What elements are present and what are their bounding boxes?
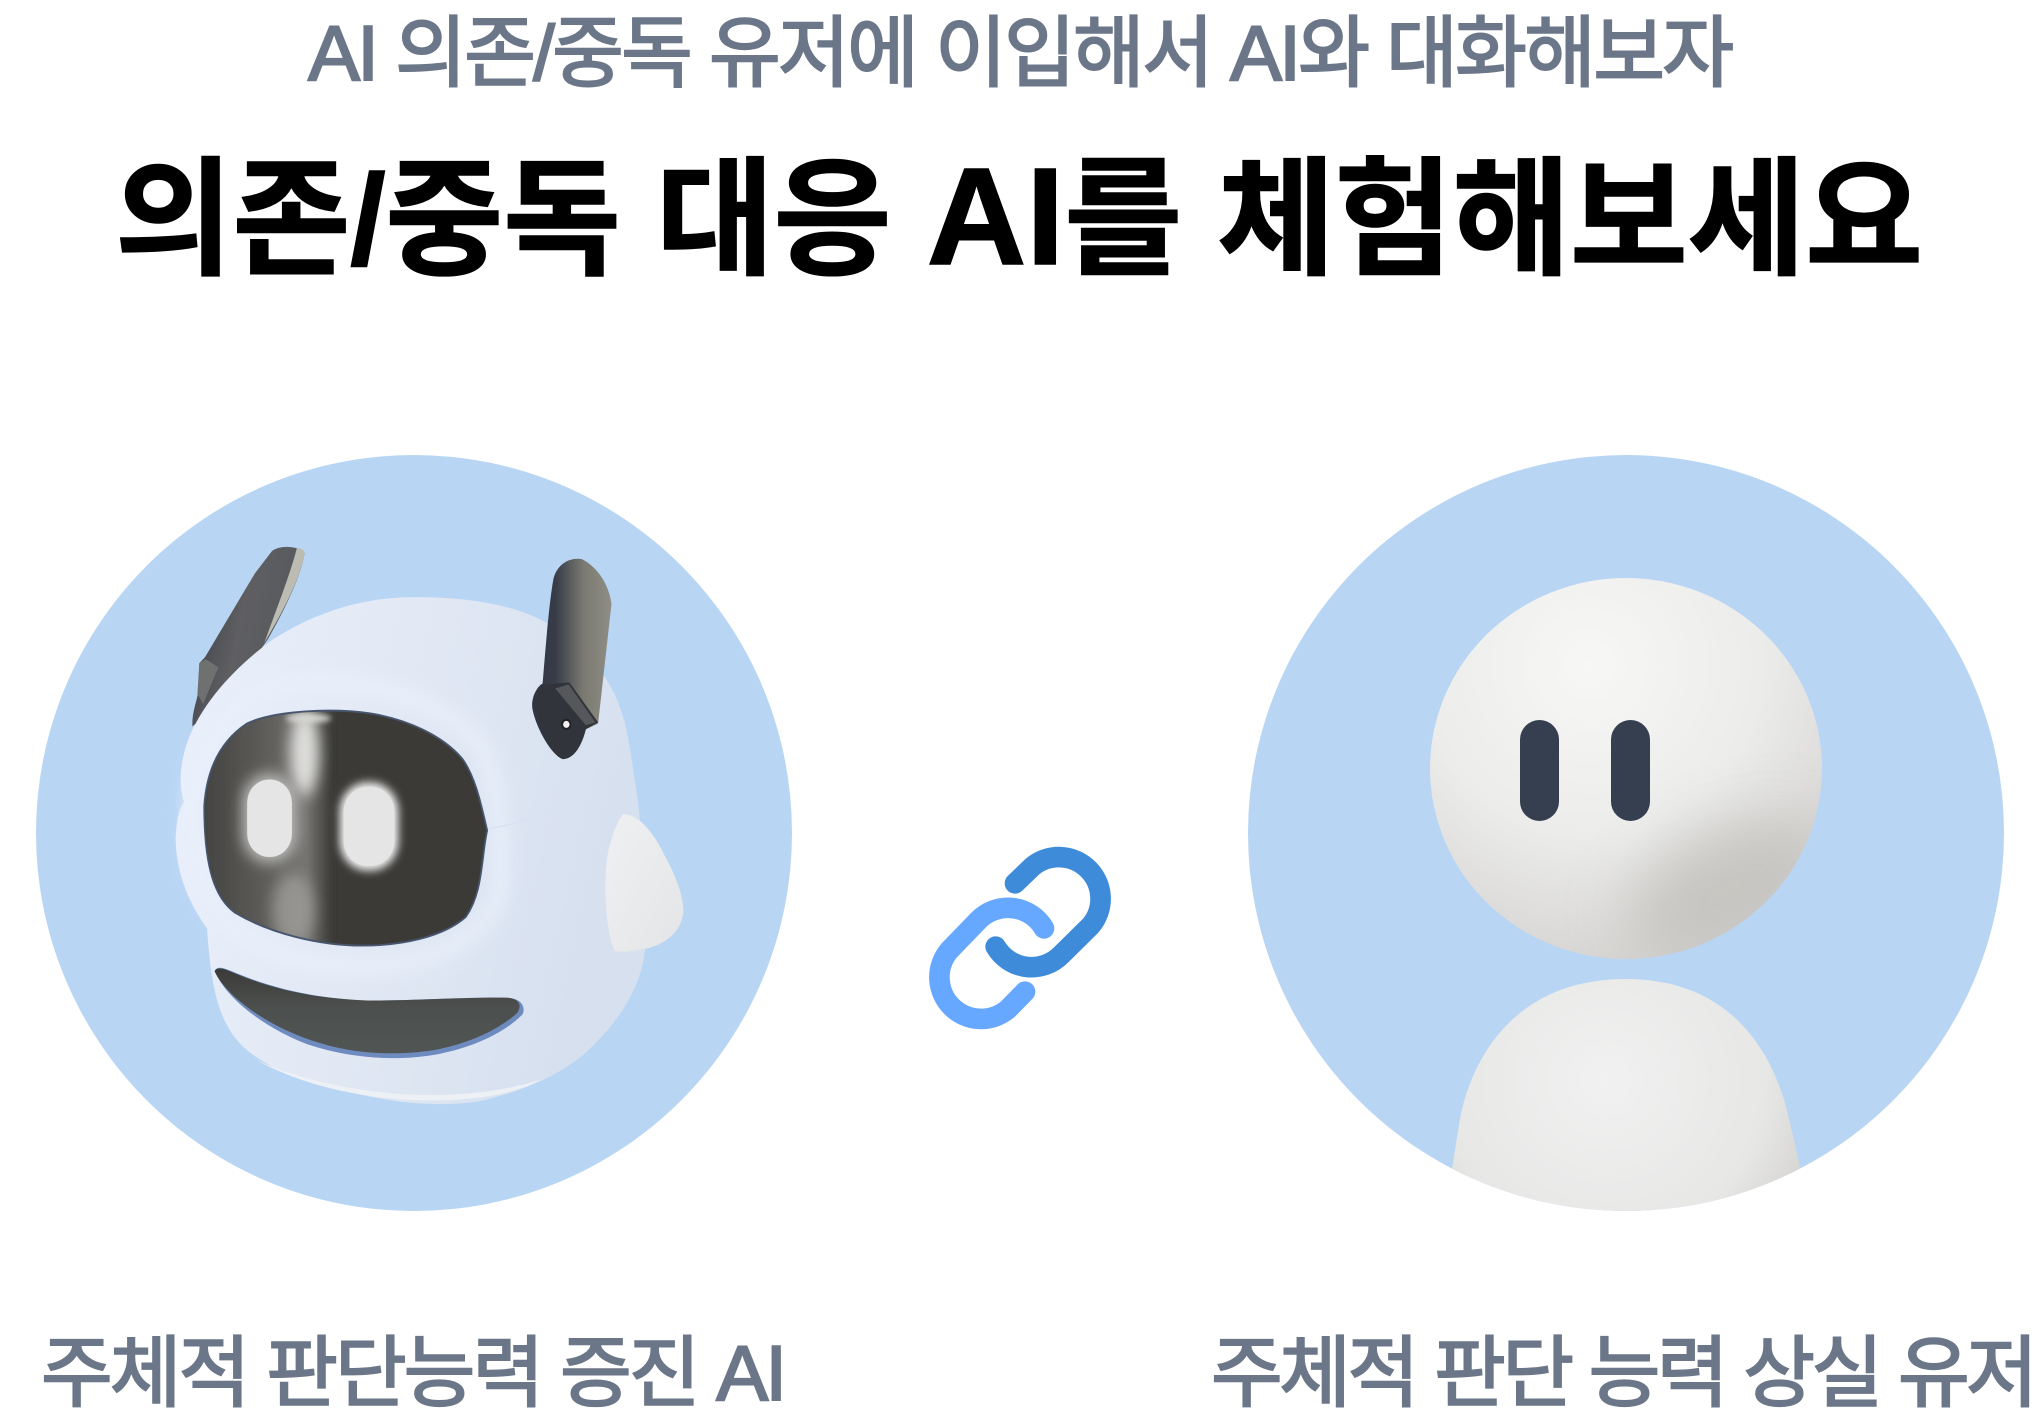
label: right: 주체적 판단 능력 상실 유저 [1211,1329,2038,1417]
panel: user avatar circle [1248,455,2004,1211]
robot right ear [532,559,611,759]
robot bottom rim [255,1059,542,1100]
robot left ear [192,547,305,726]
title: 의존/중독 대응 AI를 체험해보세요 [115,140,1923,294]
robot side antenna [605,814,683,952]
robot visor rim [205,712,486,945]
robot face highlight band [192,682,501,967]
robot visor [205,712,486,945]
label: left: 주체적 판단능력 증진 AI [41,1329,787,1417]
robot right eye [344,787,394,866]
subtitle: AI 의존/중독 유저에 이입해서 AI와 대화해보자 [308,9,1734,97]
user body [1452,979,1800,1211]
robot left eye [247,779,292,857]
link light [939,908,1044,1019]
user head [1430,578,1822,959]
user right eye [1611,720,1650,821]
panel: AI avatar circle [36,455,792,1211]
icon: robot AI character [176,547,683,1104]
robot mouth [215,968,524,1058]
icon: user character [1430,578,1822,1211]
robot head body [176,597,645,1104]
icon: chain link [939,857,1101,1019]
robot seam line [488,751,630,828]
user left eye [1520,720,1559,821]
link dark [996,857,1101,967]
